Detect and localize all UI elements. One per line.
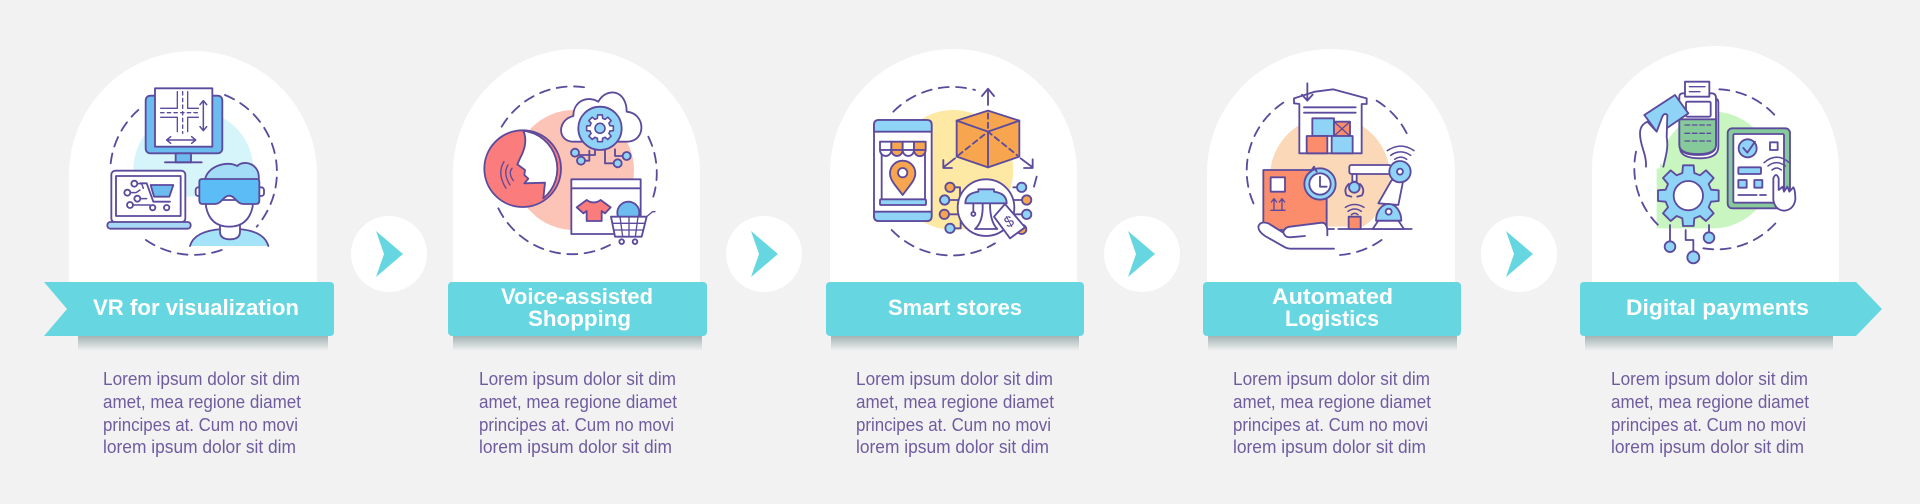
text block bbox=[103, 369, 301, 457]
text block: principes at. Cum no movi bbox=[103, 415, 298, 435]
ribbon bbox=[1580, 282, 1882, 336]
text block: amet, mea regione diamet bbox=[1233, 392, 1431, 412]
heading: Shopping bbox=[528, 306, 631, 331]
text block: principes at. Cum no movi bbox=[856, 415, 1051, 435]
heading: Voice-assisted bbox=[501, 284, 653, 309]
heading: Automated bbox=[1272, 284, 1393, 309]
ribbon shadow bbox=[1208, 336, 1457, 351]
text block: principes at. Cum no movi bbox=[1233, 415, 1428, 435]
ribbon shadow bbox=[831, 336, 1079, 351]
heading bbox=[1272, 284, 1393, 331]
text block bbox=[856, 369, 1054, 457]
arch card bbox=[69, 51, 317, 290]
icon: smart store: $ bbox=[1001, 212, 1017, 232]
panel: Automated Logistics bbox=[1203, 49, 1461, 457]
text block: lorem ipsum dolor sit dim bbox=[479, 437, 672, 457]
arch card bbox=[830, 49, 1077, 290]
arch card bbox=[1592, 46, 1839, 290]
text block: Lorem ipsum dolor sit dim bbox=[479, 369, 676, 389]
ribbon bbox=[448, 282, 707, 336]
text block: lorem ipsum dolor sit dim bbox=[103, 437, 296, 457]
text block: amet, mea regione diamet bbox=[103, 392, 301, 412]
arch card bbox=[1207, 49, 1455, 290]
heading bbox=[501, 284, 653, 331]
panel: VR for visualization bbox=[44, 51, 334, 457]
ribbon bbox=[44, 282, 334, 336]
icon: smart store bbox=[874, 87, 1037, 255]
icon: VR headset, monitor and laptop bbox=[107, 88, 277, 255]
text block: Lorem ipsum dolor sit dim bbox=[103, 369, 300, 389]
text block: principes at. Cum no movi bbox=[1611, 415, 1806, 435]
ribbon shadow bbox=[78, 336, 328, 351]
ribbon shadow bbox=[1585, 336, 1833, 351]
icon: voice, cloud and shopping bbox=[484, 86, 657, 254]
icon: warehouse and robot arm bbox=[1247, 83, 1414, 255]
panel: Digital payments bbox=[1580, 46, 1882, 457]
arrow 2 bbox=[726, 216, 802, 292]
arrow 1 bbox=[351, 216, 427, 292]
text block bbox=[1611, 369, 1809, 457]
text block bbox=[1233, 369, 1431, 457]
text block: lorem ipsum dolor sit dim bbox=[1233, 437, 1426, 457]
heading: VR for visualization bbox=[93, 295, 299, 320]
ribbon shadow bbox=[453, 336, 702, 351]
text block: Lorem ipsum dolor sit dim bbox=[1233, 369, 1430, 389]
ribbon bbox=[1203, 282, 1461, 336]
heading: Digital payments bbox=[1626, 295, 1809, 320]
text block: amet, mea regione diamet bbox=[856, 392, 1054, 412]
text block: Lorem ipsum dolor sit dim bbox=[856, 369, 1053, 389]
icon: payment terminal, tablet and gear bbox=[1634, 82, 1795, 263]
text block bbox=[479, 369, 677, 457]
heading: Smart stores bbox=[888, 295, 1022, 320]
text block: amet, mea regione diamet bbox=[1611, 392, 1809, 412]
arrow 3 bbox=[1104, 216, 1180, 292]
panel: Smart stores bbox=[826, 49, 1084, 457]
text block: principes at. Cum no movi bbox=[479, 415, 674, 435]
ribbon bbox=[826, 282, 1084, 336]
text block: Lorem ipsum dolor sit dim bbox=[1611, 369, 1808, 389]
heading: Logistics bbox=[1285, 306, 1379, 331]
text block: lorem ipsum dolor sit dim bbox=[1611, 437, 1804, 457]
text block: lorem ipsum dolor sit dim bbox=[856, 437, 1049, 457]
arrow 4 bbox=[1481, 216, 1557, 292]
text block: amet, mea regione diamet bbox=[479, 392, 677, 412]
arch card bbox=[453, 49, 700, 290]
panel: Voice-assisted Shopping bbox=[448, 49, 707, 457]
